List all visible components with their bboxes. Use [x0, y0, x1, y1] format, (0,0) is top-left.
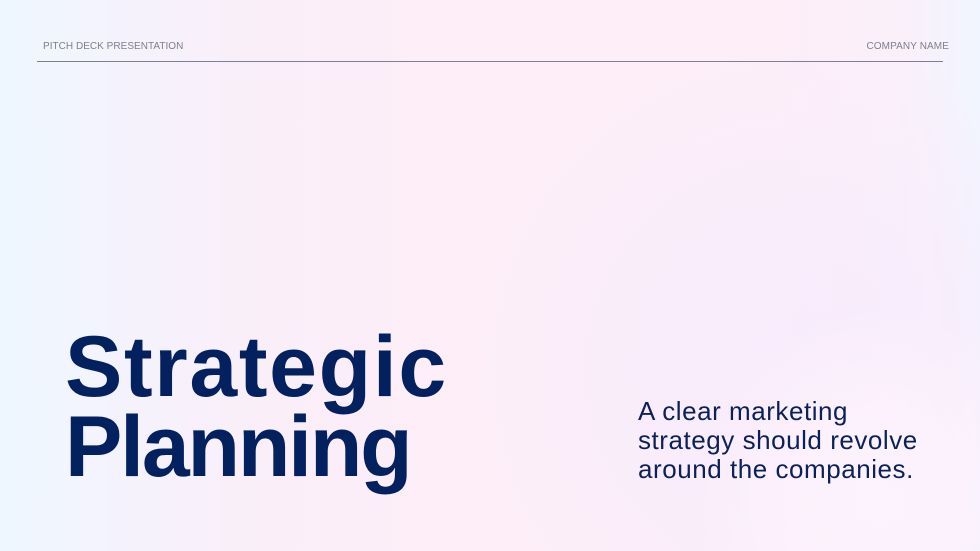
subtitle text block: around the companies.: [638, 454, 914, 484]
header label: pitch deck presentation: PITCH DECK PRESENTATION: [43, 41, 183, 52]
title: [65, 319, 448, 495]
subtitle text block: [638, 396, 918, 484]
header label: company name: COMPANY NAME: [866, 41, 949, 52]
title: Planning: [65, 399, 411, 495]
subtitle text block: A clear marketing: [638, 396, 848, 426]
title: Strategic: [65, 319, 448, 415]
subtitle text block: strategy should revolve: [638, 425, 918, 455]
